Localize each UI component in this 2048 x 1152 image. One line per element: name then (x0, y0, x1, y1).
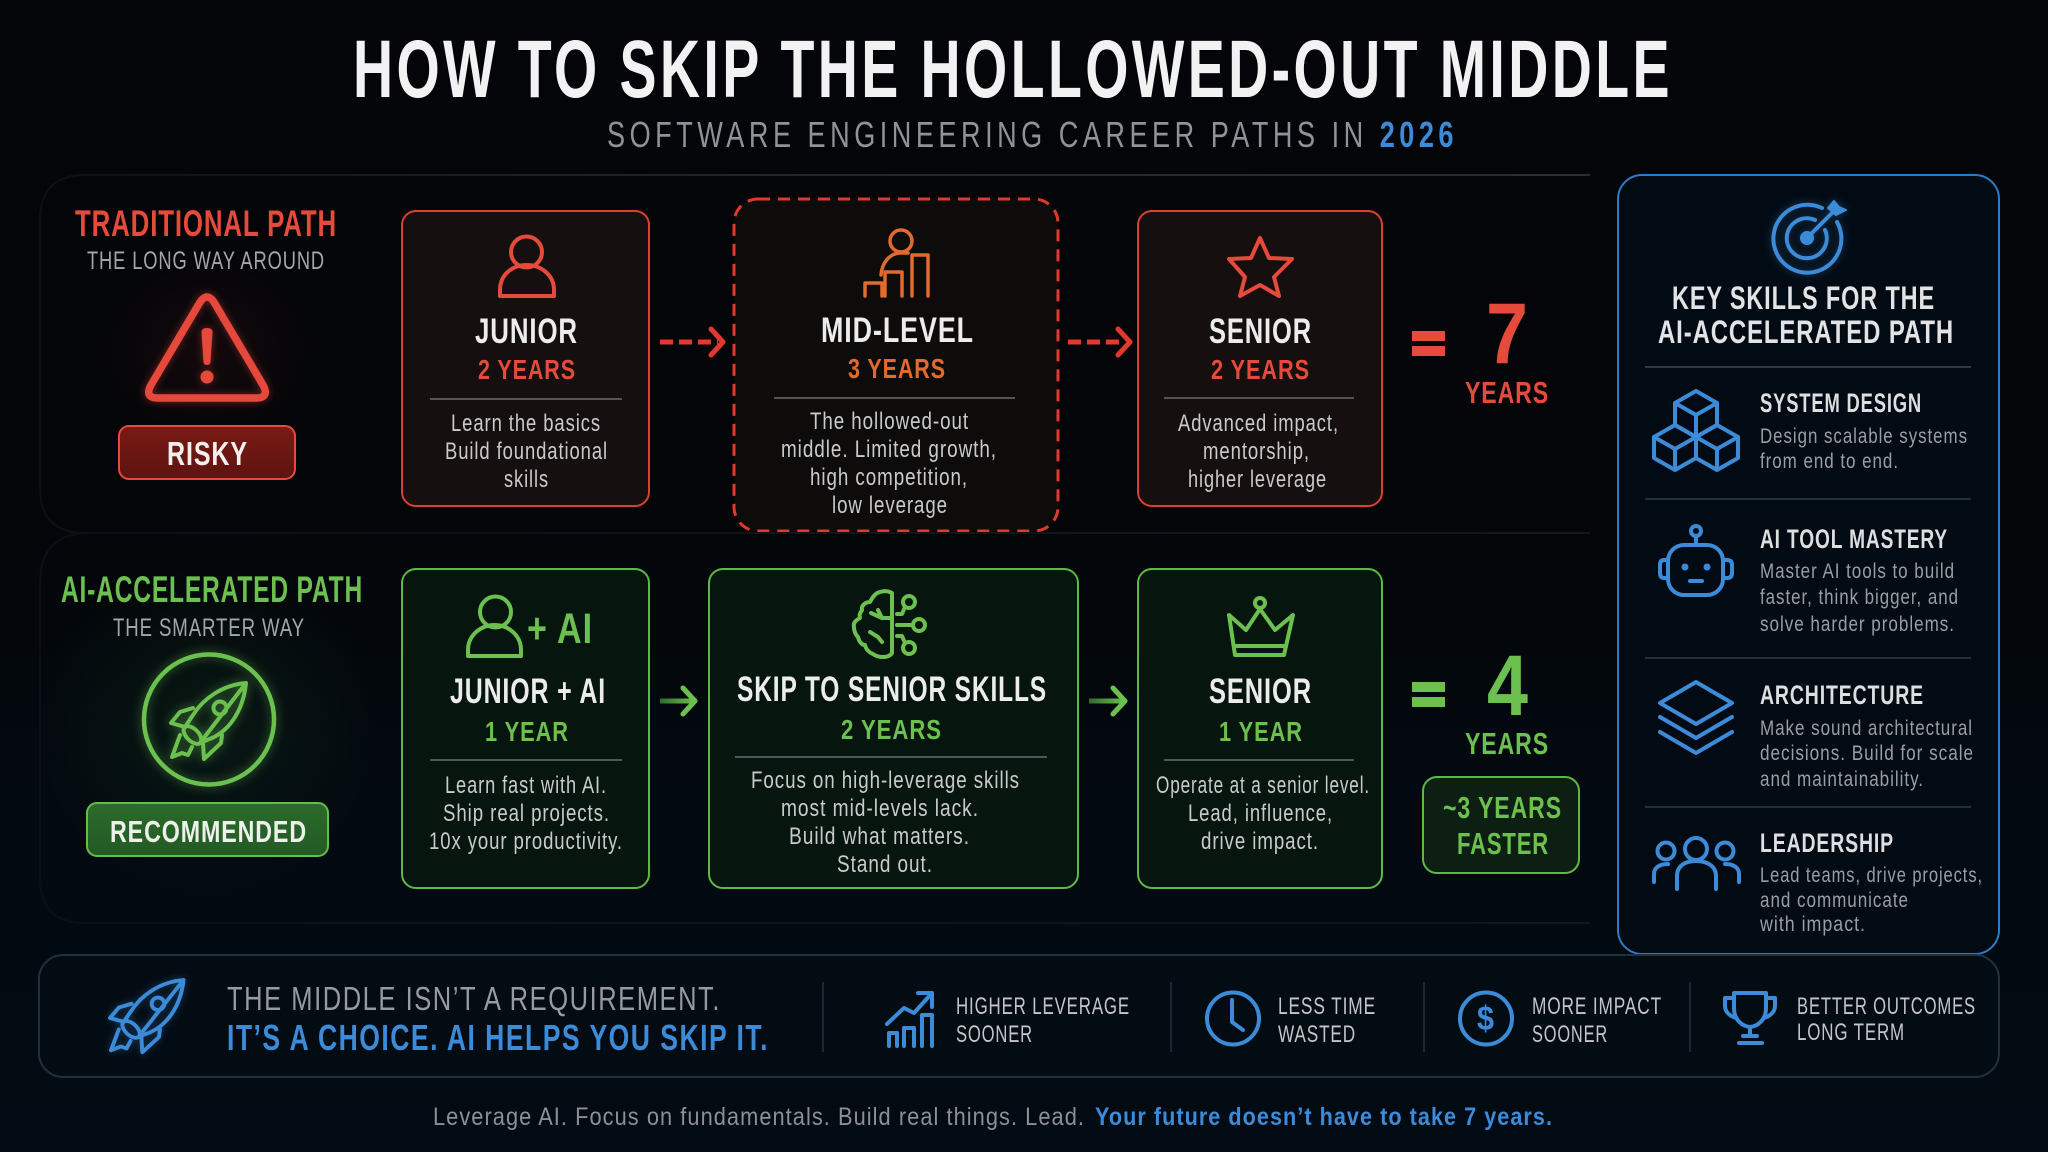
icon: trophy (1725, 993, 1775, 1043)
less time text: WASTED (1278, 1021, 1356, 1048)
ai tool mastery text: faster, think bigger, and (1760, 585, 1959, 609)
skip description: Stand out. (837, 851, 933, 878)
leadership text: Lead teams, drive projects, (1760, 863, 1983, 887)
system design text (1760, 388, 1968, 473)
icon: clock (1207, 992, 1259, 1044)
better outcomes text (1797, 993, 1976, 1046)
key skills heading (1658, 280, 1954, 350)
banner message: THE MIDDLE ISN’T A REQUIREMENT. (227, 980, 721, 1017)
leadership text: and communicate (1760, 888, 1909, 912)
better outcomes text: LONG TERM (1797, 1019, 1905, 1046)
subtitle: SOFTWARE ENGINEERING CAREER PATHS IN 2026 (607, 114, 1458, 155)
icon: dollar coin (1460, 992, 1512, 1044)
banner box (39, 955, 1999, 1077)
total: 4 years: YEARS (1465, 726, 1549, 761)
icon: people (1654, 838, 1739, 889)
total: 7 years (1412, 286, 1549, 410)
skip description (751, 767, 1020, 878)
mid-level description (781, 408, 997, 519)
benefit: more impact sooner (1460, 992, 1662, 1048)
junior + ai duration: 1 YEAR (485, 716, 569, 747)
skip description: Focus on high-leverage skills (751, 767, 1020, 794)
junior + ai description (429, 772, 623, 855)
arrow: junior to mid-level (660, 329, 723, 355)
mid-level description: middle. Limited growth, (781, 436, 997, 463)
ai tool mastery text: Master AI tools to build (1760, 559, 1955, 583)
badge: 3 years faster (1423, 777, 1579, 873)
key skills heading: AI-ACCELERATED PATH (1658, 314, 1954, 350)
junior duration: 2 YEARS (478, 354, 576, 385)
icon: target (1773, 201, 1846, 273)
higher leverage text: HIGHER LEVERAGE (956, 993, 1130, 1020)
senior heading: SENIOR (1209, 312, 1312, 351)
banner message: IT’S A CHOICE. AI HELPS YOU SKIP IT. (227, 1017, 769, 1058)
less time text: LESS TIME (1278, 993, 1376, 1020)
senior description: higher leverage (1188, 466, 1327, 493)
skip duration: 2 YEARS (841, 714, 942, 745)
leadership text: LEADERSHIP (1760, 828, 1894, 858)
senior ai path duration: 1 YEAR (1219, 716, 1303, 747)
architecture text: decisions. Build for scale (1760, 741, 1974, 765)
badge: recommended (87, 803, 328, 856)
icon: star (1229, 238, 1292, 296)
mid-level description: low leverage (832, 492, 948, 519)
senior description: Advanced impact, (1178, 410, 1339, 437)
panel: traditional path (40, 175, 1590, 533)
icon: rocket in circle (144, 654, 274, 784)
junior description: skills (504, 466, 549, 493)
label: the smarter way: THE SMARTER WAY (113, 614, 305, 642)
senior duration: 2 YEARS (1211, 354, 1310, 385)
arrow: skip to senior (1089, 688, 1125, 714)
system design text: SYSTEM DESIGN (1760, 388, 1922, 418)
total: 7 years: YEARS (1465, 375, 1549, 410)
arrow: mid-level to senior (1068, 329, 1130, 355)
ai tool mastery text: solve harder problems. (1760, 612, 1955, 636)
panel: bottom banner (39, 955, 1999, 1077)
architecture text: ARCHITECTURE (1760, 680, 1924, 710)
card: junior + ai (402, 569, 649, 888)
mid-level heading: MID-LEVEL (821, 311, 974, 350)
skill: ai tool mastery (1660, 524, 1959, 636)
senior ai path description (1156, 772, 1370, 855)
leadership text: with impact. (1759, 912, 1866, 936)
total: 4 years: 4 (1487, 638, 1528, 734)
icon: person (500, 236, 554, 296)
system design text: Design scalable systems (1760, 424, 1968, 448)
key skills panel box (1618, 175, 1999, 954)
architecture text: and maintainability. (1760, 767, 1924, 791)
icon: person plus ai (468, 596, 593, 656)
senior ai path description: Operate at a senior level. (1156, 772, 1370, 799)
senior ai path heading: SENIOR (1209, 672, 1312, 711)
skill: architecture (1660, 680, 1974, 791)
higher leverage text: SOONER (956, 1021, 1033, 1048)
junior + ai description: Ship real projects. (443, 800, 610, 827)
junior description: Learn the basics (451, 410, 601, 437)
total: 4 years (1412, 638, 1549, 761)
mid-level description: high competition, (810, 464, 968, 491)
card: senior ai path (1138, 569, 1382, 888)
junior + ai heading: JUNIOR + AI (450, 672, 606, 711)
skill: system design (1654, 388, 1968, 473)
benefit: better outcomes long term (1725, 993, 1976, 1046)
better outcomes text: BETTER OUTCOMES (1797, 993, 1976, 1020)
badge: risky (119, 426, 295, 479)
panel outline: ai path (40, 533, 1590, 923)
skip description: most mid-levels lack. (781, 795, 979, 822)
senior ai path description: drive impact. (1201, 828, 1319, 855)
less time text (1278, 993, 1376, 1048)
benefit: higher leverage sooner (887, 993, 1130, 1048)
footer tagline: Leverage AI. Focus on fundamentals. Build real things. Lead. (433, 1103, 1085, 1131)
panel: key skills (1618, 175, 1999, 954)
card: senior (1138, 211, 1382, 506)
leadership text (1759, 828, 1983, 936)
label: ai-accelerated heading: AI-ACCELERATED PATH (61, 569, 363, 610)
panel: ai-accelerated path (40, 533, 1590, 923)
badge: 3 years faster: FASTER (1457, 826, 1549, 861)
icon: warning triangle (149, 297, 265, 398)
arrow: junior + ai to skip (660, 688, 695, 714)
icon: rocket (110, 980, 184, 1052)
label: the long way around: THE LONG WAY AROUND (87, 247, 325, 275)
icon: dollar coin: $ (1477, 1000, 1494, 1038)
skip description: Build what matters. (789, 823, 970, 850)
senior ai path description: Lead, influence, (1188, 800, 1333, 827)
skip heading: SKIP TO SENIOR SKILLS (737, 670, 1047, 709)
icon: robot (1660, 526, 1732, 595)
badge: recommended: RECOMMENDED (110, 814, 307, 849)
icon: chart (887, 993, 932, 1046)
higher leverage text (956, 993, 1130, 1048)
senior description: mentorship, (1203, 438, 1310, 465)
badge: 3 years faster: ~3 YEARS (1443, 790, 1562, 825)
architecture text: Make sound architectural (1760, 716, 1973, 740)
icon: layers (1660, 682, 1732, 753)
junior heading: JUNIOR (475, 312, 578, 351)
ai tool mastery text (1760, 524, 1959, 636)
more impact text (1532, 993, 1662, 1048)
more impact text: MORE IMPACT (1532, 993, 1662, 1020)
architecture text (1760, 680, 1974, 791)
footer tagline: Your future doesn’t have to take 7 years. (1095, 1103, 1553, 1131)
system design text: from end to end. (1760, 449, 1899, 473)
senior description (1178, 410, 1339, 493)
skill: leadership (1654, 828, 1983, 936)
junior description (445, 410, 608, 493)
badge: risky: RISKY (167, 435, 248, 472)
card: mid-level (734, 199, 1058, 531)
card: skip to senior skills (709, 569, 1078, 888)
mid-level description: The hollowed-out (810, 408, 969, 435)
icon: cubes (1654, 391, 1738, 470)
banner message (227, 980, 769, 1058)
mid-level duration: 3 YEARS (848, 353, 946, 384)
more impact text: SOONER (1532, 1021, 1608, 1048)
junior description: Build foundational (445, 438, 608, 465)
icon: climbing person and bars (865, 230, 928, 296)
junior + ai description: 10x your productivity. (429, 828, 623, 855)
icon: brain network (854, 591, 925, 657)
ai tool mastery text: AI TOOL MASTERY (1760, 524, 1948, 554)
total: 7 years: 7 (1486, 286, 1528, 382)
key skills heading: KEY SKILLS FOR THE (1672, 280, 1935, 316)
card: junior (402, 211, 649, 506)
label: traditional path heading: TRADITIONAL PATH (75, 203, 337, 244)
benefit: less time wasted (1207, 992, 1376, 1048)
icon: person plus ai: + AI (527, 605, 593, 653)
icon: crown (1229, 598, 1293, 655)
junior + ai description: Learn fast with AI. (445, 772, 607, 799)
panel outline: traditional (40, 175, 1590, 533)
footer tagline (433, 1103, 1553, 1131)
